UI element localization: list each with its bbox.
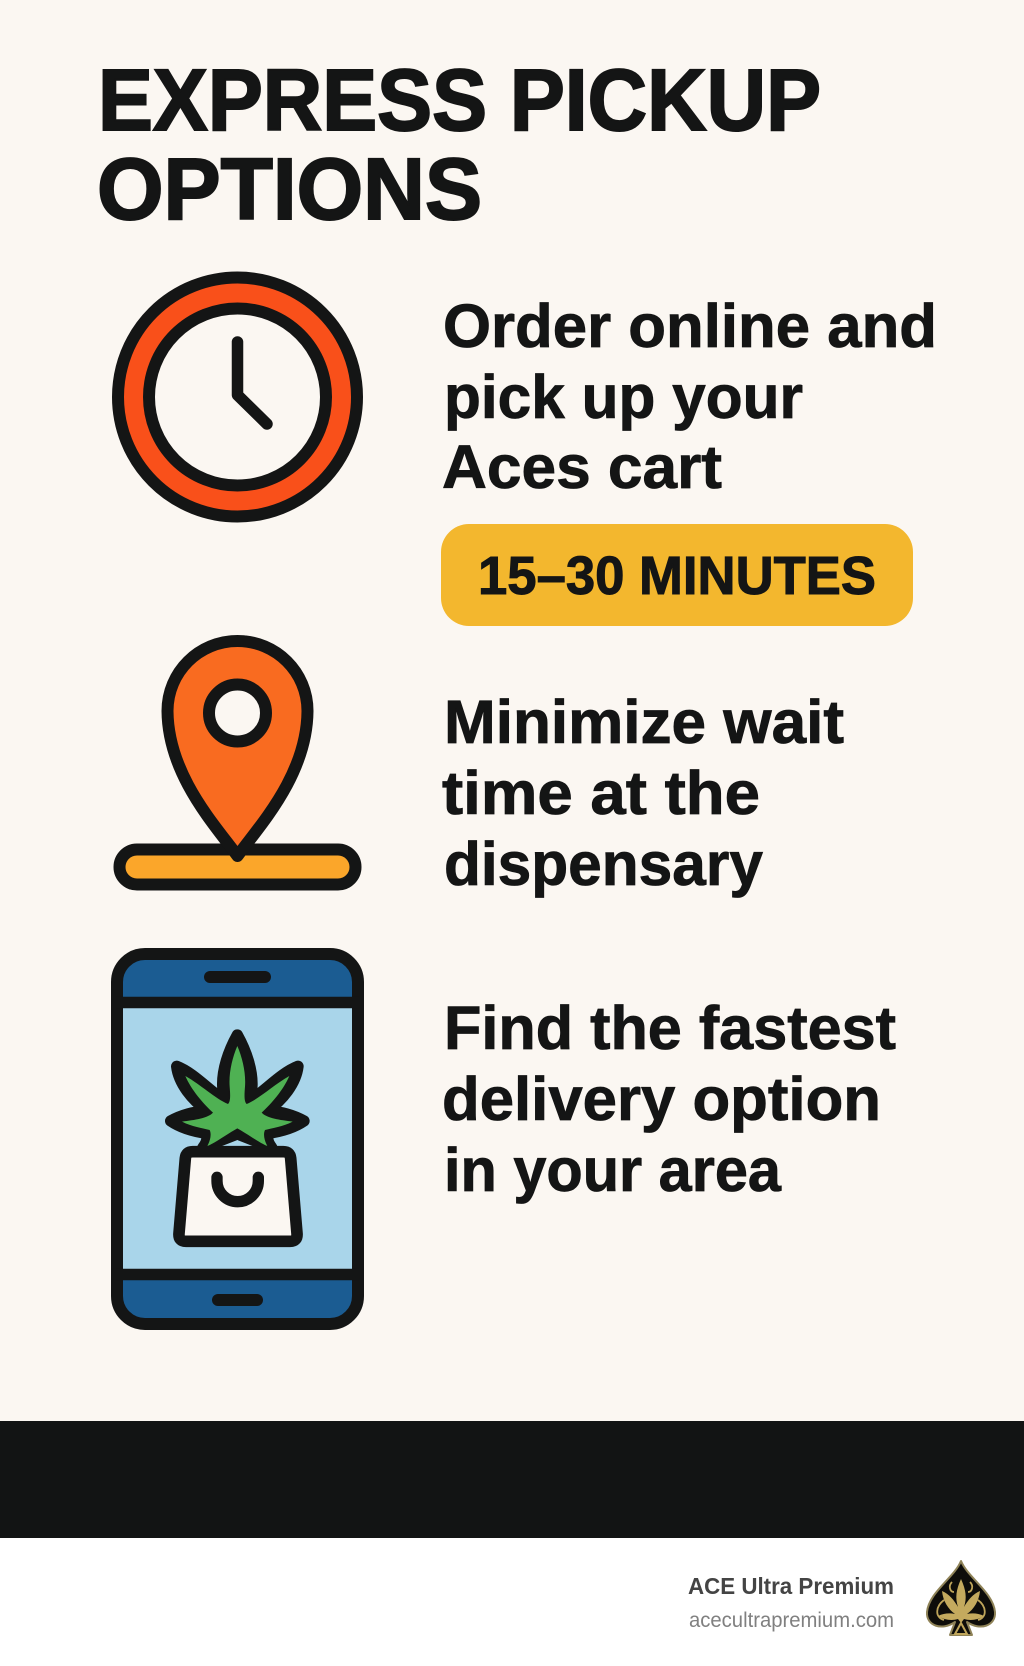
footer band: [0, 1421, 1024, 1538]
icon: spade logo: [927, 1561, 995, 1635]
shopping bag: [179, 1152, 297, 1241]
title: EXPRESS PICKUP: [98, 52, 821, 149]
callout: time badge: [441, 524, 913, 626]
brand name: ACE Ultra Premium: [688, 1573, 894, 1599]
icon: clock: [118, 278, 357, 516]
footer panel: [0, 1538, 1024, 1666]
text: find fastest: [442, 994, 896, 1204]
text: minimize wait: Minimize wait: [444, 688, 844, 756]
text: minimize wait: dispensary: [444, 830, 763, 898]
text: minimize wait: time at the: [442, 759, 760, 827]
text: minimize wait: [442, 688, 844, 898]
leaf: [171, 1035, 304, 1147]
text: order online: Order online and: [443, 292, 937, 360]
callout: time badge: 15–30 MINUTES: [478, 546, 876, 606]
text: find fastest: Find the fastest: [444, 994, 896, 1062]
text: find fastest: delivery option: [442, 1065, 881, 1133]
icon: phone with cannabis shopping bag: [116, 954, 359, 1324]
text: order online: pick up your: [444, 363, 803, 431]
text: order online: Aces cart: [442, 433, 722, 501]
text: find fastest: in your area: [444, 1136, 782, 1204]
text: order online: [442, 292, 937, 501]
brand url: acecultrapremium.com: [689, 1609, 894, 1632]
title: [97, 52, 821, 238]
icon: location pin: [120, 641, 356, 884]
title: OPTIONS: [97, 141, 482, 238]
